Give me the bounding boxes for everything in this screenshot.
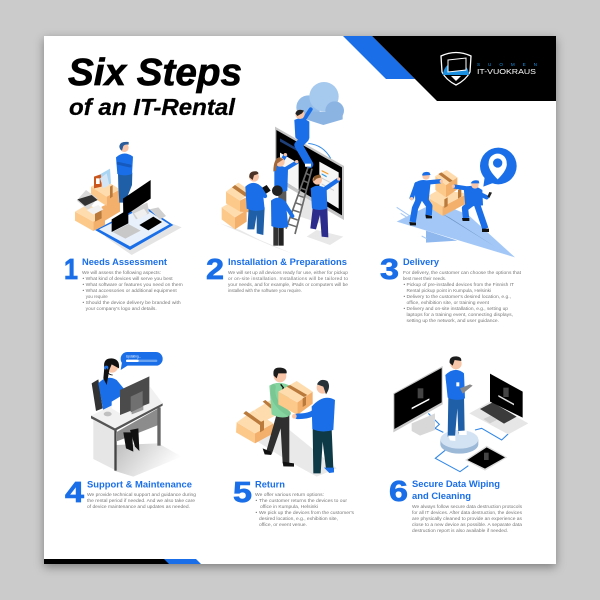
ladder (286, 167, 312, 234)
step 3: delivery: office, exhibition site, or training event (406, 300, 490, 305)
boxes (222, 183, 263, 229)
illustration: support and maintenance (91, 352, 182, 477)
logo (441, 52, 537, 85)
step 6: secure data wiping and cleaning: for all IT devices. After data destruction, the devices (412, 510, 523, 515)
step 1: needs assessment: • (82, 300, 84, 305)
step 3: delivery: Rental pickup point in Kumpula, Helsinki (406, 288, 491, 293)
step 6: secure data wiping and cleaning: destruction report is also available if needed. (412, 528, 508, 533)
step 4: support and maintenance (65, 477, 196, 509)
illustration: delivery (397, 148, 517, 257)
step 1: needs assessment: • (82, 276, 84, 281)
icon: location pin bubble (480, 148, 517, 187)
boxes (427, 170, 468, 216)
step 3: delivery: Delivery to the customer's desired location, e.g., (406, 294, 511, 299)
step 5: return: • (256, 510, 258, 515)
person with clipboard (245, 171, 271, 235)
step 6: secure data wiping and cleaning (389, 476, 523, 533)
step 3: delivery: Pickup of pre-installed devices from the Finnish IT (406, 282, 514, 287)
step 6: secure data wiping and cleaning: We always follow secure data destruction protocols (412, 504, 523, 509)
platform (440, 430, 478, 454)
tablet (465, 446, 507, 471)
step 3: delivery: 3 (380, 254, 399, 286)
step 3: delivery: • (404, 294, 406, 299)
step 5: return: office, or event venue. (259, 522, 307, 527)
person in green shirt (263, 368, 294, 467)
step 5: return (233, 477, 355, 527)
step 5: return: We pick up the devices from the customer's (259, 510, 355, 515)
paper plane (397, 202, 515, 257)
step 2: installation and preparations: your needs, and for example, iPads or computers will be (228, 282, 348, 287)
step 1: needs assessment: Should the device delivery be branded with (86, 300, 181, 305)
cables (428, 413, 518, 472)
step 2: installation and preparations: or on-site installation. Installations will be tailored to (228, 276, 348, 281)
step 3: delivery: best meet their needs. (403, 276, 446, 281)
person at right panel (310, 175, 340, 237)
title (68, 52, 242, 120)
person on ladder (294, 109, 311, 167)
step 1: needs assessment: • (82, 282, 84, 287)
step 2: installation and preparations: Installation & Preparations (228, 256, 347, 267)
step 6: secure data wiping and cleaning: 6 (389, 476, 408, 508)
step 3: delivery: • (404, 282, 406, 287)
logo: IT-VUOKRAUS (477, 67, 536, 76)
illustration: needs assessment (75, 142, 182, 255)
step 6: secure data wiping and cleaning: are physically cleaned to provide an experience as (412, 516, 523, 521)
step 1: needs assessment: 1 (64, 254, 78, 286)
step 5: return: Return (255, 478, 285, 490)
step 5: return: desired location, e.g., exhibition site, (259, 516, 338, 521)
step 3: delivery: For delivery, the customer can choose the options that (403, 270, 522, 275)
title: Six Steps (68, 52, 242, 94)
top-right corner banner with logo (343, 36, 556, 101)
step 1: needs assessment: • (82, 288, 84, 293)
woman from behind (271, 185, 292, 246)
step 4: support and maintenance: Support & Maintenance (87, 478, 192, 490)
agent (98, 358, 125, 412)
step 4: support and maintenance: the rental period if needed. And we also take care (87, 498, 195, 503)
step 5: return: 5 (233, 477, 252, 509)
step 5: return: • (256, 498, 258, 503)
step 1: needs assessment (64, 254, 183, 311)
title: of an IT-Rental (69, 94, 236, 120)
step 3: delivery: setting up the network, and user guidance. (406, 318, 499, 323)
step 5: return: We offer various return options: (255, 492, 324, 497)
step 2: installation and preparations (206, 254, 348, 293)
step 3: delivery: Delivery and on-site installation, e.g., setting up (406, 306, 508, 311)
step 5: return: office in Kumpula, Helsinki (260, 504, 318, 509)
step 4: support and maintenance: of device maintenance and updates as needed. (87, 504, 190, 509)
step 1: needs assessment: Needs Assessment (82, 256, 167, 267)
person in blue sweater (292, 380, 335, 473)
step 3: delivery: • (404, 306, 406, 311)
step 2: installation and preparations: installed with the software you require. (228, 288, 302, 293)
worker left (409, 172, 443, 225)
woman with ponytail (273, 153, 298, 203)
monitor (393, 366, 443, 436)
logo: SUOMEN (477, 62, 537, 67)
step 5: return: The customer returns the devices to our (259, 498, 347, 503)
step 1: needs assessment: What accessories or additional equipment (86, 288, 177, 293)
speech bubble: updating: Updating... (126, 355, 141, 359)
step 3: delivery: Delivery (403, 256, 440, 267)
bottom-left colour bar (44, 559, 201, 564)
step 1: needs assessment: What kind of devices will serve you best (86, 276, 173, 281)
step 1: needs assessment: What software or features you need on them (86, 282, 183, 287)
held box (278, 381, 313, 415)
step 1: needs assessment: you require (86, 294, 108, 299)
step 3: delivery: laptops for a training event, connecting displays, (406, 312, 513, 317)
cloud (296, 82, 344, 125)
step 1: needs assessment: your company's logo and details. (86, 306, 157, 311)
step 6: secure data wiping and cleaning: Secure Data Wiping (412, 478, 500, 489)
laptop (469, 374, 528, 434)
step 2: installation and preparations: 2 (206, 254, 224, 286)
person with tablet (445, 356, 473, 441)
step 6: secure data wiping and cleaning: close to a new device as possible. A separate data (412, 522, 522, 527)
illustration: return (236, 368, 337, 477)
step 4: support and maintenance: 4 (65, 477, 84, 509)
illustration: installation and preparations (220, 82, 344, 254)
step 2: installation and preparations: We will set up all devices ready for use, either for pickup (228, 270, 348, 275)
step 1: needs assessment: We will assess the following aspects: (82, 270, 161, 275)
step 6: secure data wiping and cleaning: and Cleaning (412, 490, 471, 501)
step 3: delivery (380, 254, 522, 323)
step 4: support and maintenance: We provide technical support and guidance during (87, 492, 196, 497)
illustration: secure data wiping (393, 356, 528, 472)
worker right (452, 180, 492, 232)
